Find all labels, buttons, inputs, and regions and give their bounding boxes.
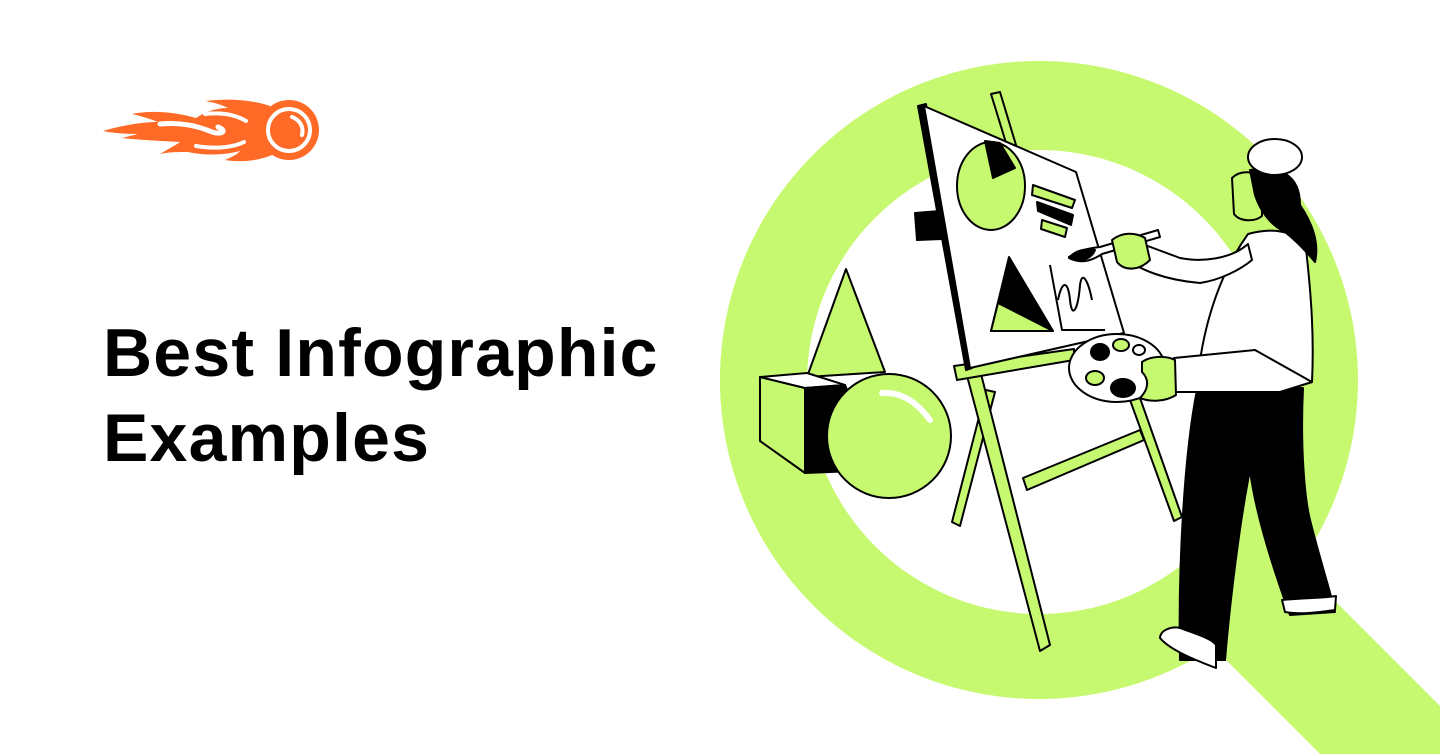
- title: Best Infographic: [103, 315, 659, 391]
- title: Examples: [103, 400, 430, 476]
- painter: [1069, 139, 1336, 668]
- easel: [915, 92, 1182, 651]
- geometric shapes: [760, 269, 951, 498]
- title: [103, 315, 659, 476]
- logo: fireball: [103, 100, 319, 162]
- magnifier ring: [720, 61, 1440, 754]
